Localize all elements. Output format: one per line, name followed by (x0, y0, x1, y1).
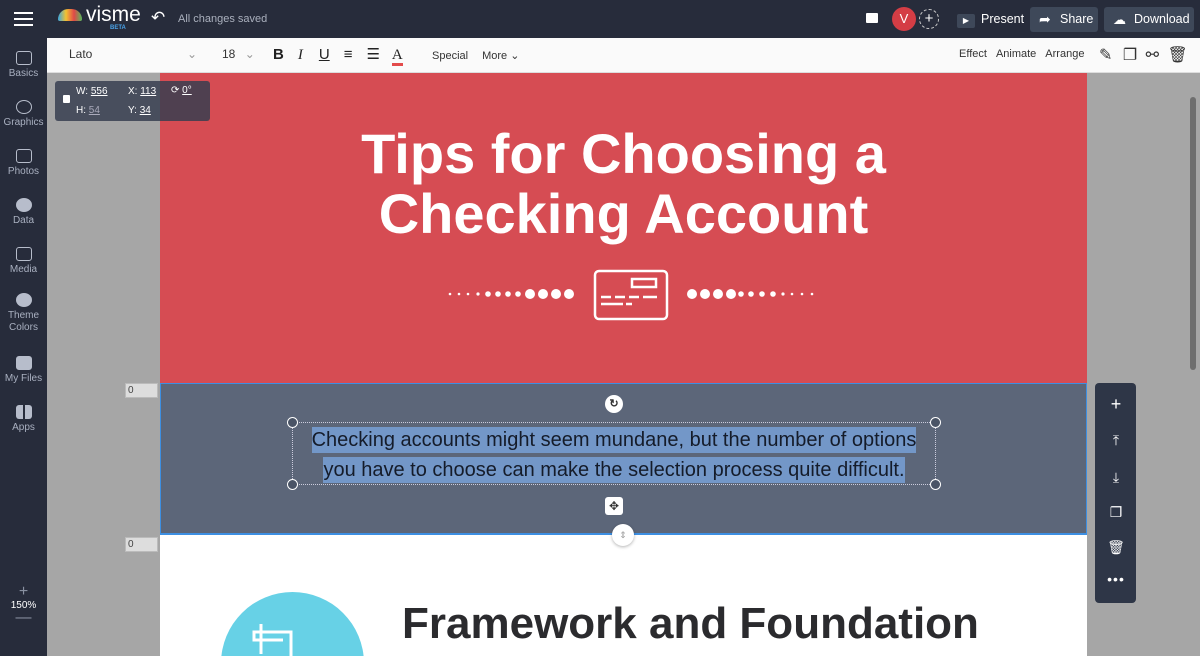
icons: paint, copy, link, delete: ✎ ❐ ⚯ 🗑 (1099, 47, 1188, 64)
text toolbar: ⌄ (187, 47, 197, 61)
font selector: Lato (69, 47, 92, 61)
top bar (0, 0, 1200, 38)
sidebar: graphics: Graphics (3, 117, 44, 128)
title: Tips for Choosing a (361, 122, 886, 185)
intro text: Checking accounts might seem mundane, but the number of options (312, 429, 916, 451)
icon: credit card (595, 271, 667, 319)
download button: ☁ (1113, 12, 1126, 27)
logo: visme: BETA (110, 25, 126, 31)
sidebar: data: Data (13, 215, 34, 226)
icon: resize handle (612, 524, 634, 546)
divider with card icon (448, 270, 814, 320)
share button: Share (1060, 12, 1093, 26)
header panel: red (160, 73, 1087, 383)
sidebar: my files (5, 356, 42, 384)
intro panel: slate (160, 383, 1087, 535)
logo: visme: visme (86, 3, 141, 26)
avatar (892, 7, 916, 31)
dimension overlay: ⟳ 0° (171, 85, 192, 96)
sidebar: theme colors: Colors (9, 322, 38, 333)
zoom control: — (16, 609, 32, 626)
font size: 18 ⌄ (222, 47, 255, 61)
logo: visme (58, 3, 141, 31)
icon: move handle: ✥ (609, 499, 619, 513)
special / more menu: Special More ⌄ (432, 50, 519, 62)
right actions: Effect Animate Arrange (959, 48, 1084, 60)
present button: ▶ (963, 16, 969, 25)
dimension overlay: W: 556 (76, 86, 108, 97)
sidebar: media (10, 247, 38, 275)
text: 0 (128, 539, 134, 550)
scrollbar (1190, 97, 1196, 370)
sidebar: apps (12, 405, 35, 433)
content panel: white (160, 535, 1087, 656)
avatar: V (900, 11, 908, 26)
icon: comments (866, 13, 878, 23)
sidebar: basics: Basics (9, 68, 38, 79)
present button (957, 12, 1024, 28)
sidebar: photos: Photos (8, 166, 39, 177)
sidebar: theme colors (8, 293, 39, 333)
icon: add user: + (925, 10, 933, 27)
icon: add user (919, 9, 939, 29)
icon: rotate handle: ↻ (609, 398, 619, 410)
download button: Download (1134, 12, 1190, 26)
text toolbar (47, 38, 1200, 73)
title (361, 122, 886, 245)
sidebar: media: Media (10, 264, 37, 275)
dimension overlay: H: 54 (76, 105, 100, 116)
share button: ➦ (1039, 11, 1051, 27)
dimension overlay (55, 81, 210, 121)
dimension overlay: X: 113 (128, 86, 156, 97)
formatting buttons: B I U ≡ ☰ A (273, 46, 403, 63)
icon: rotate handle (605, 395, 623, 413)
zoom control (11, 583, 36, 626)
right floating toolbar: ⤒ (1113, 432, 1119, 448)
sidebar: graphics (3, 100, 44, 128)
zoom control: + (19, 583, 28, 600)
zoom control: 150% (11, 600, 36, 611)
page offset inputs: 0 (128, 385, 134, 396)
right floating toolbar: 🗑 (1107, 539, 1125, 555)
right floating toolbar: ••• (1107, 571, 1125, 587)
right floating toolbar: + (1111, 394, 1121, 414)
title: Checking Account (379, 182, 868, 245)
icon: move handle (605, 497, 623, 515)
section heading: Framework and Foundation (402, 599, 979, 648)
right floating toolbar (1095, 383, 1136, 603)
page offset inputs (125, 383, 158, 398)
sidebar: photos (8, 149, 39, 177)
intro text (312, 427, 916, 483)
left sidebar (0, 38, 47, 656)
download button (1104, 7, 1194, 32)
share button (1030, 7, 1098, 32)
right floating toolbar: ❐ (1110, 504, 1122, 520)
icon: hamburger menu (14, 12, 33, 26)
sidebar: apps: Apps (12, 422, 35, 433)
dimension overlay: Y: 34 (128, 105, 151, 116)
selected text block (292, 422, 936, 485)
intro text: you have to choose can make the selection process quite difficult. (323, 459, 905, 481)
icon: undo: ↶ (151, 8, 165, 27)
sidebar: my files: My Files (5, 373, 42, 384)
right floating toolbar: ⤓ (1113, 469, 1119, 485)
sidebar: basics (9, 51, 38, 79)
icon: framework circle (221, 592, 364, 656)
icon: resize handle: ⇕ (619, 530, 627, 540)
font selector (69, 47, 197, 61)
sidebar: theme colors: Theme (8, 310, 39, 321)
present button: Present (981, 12, 1024, 26)
sidebar: data (13, 198, 34, 226)
status text: All changes saved (178, 13, 267, 25)
